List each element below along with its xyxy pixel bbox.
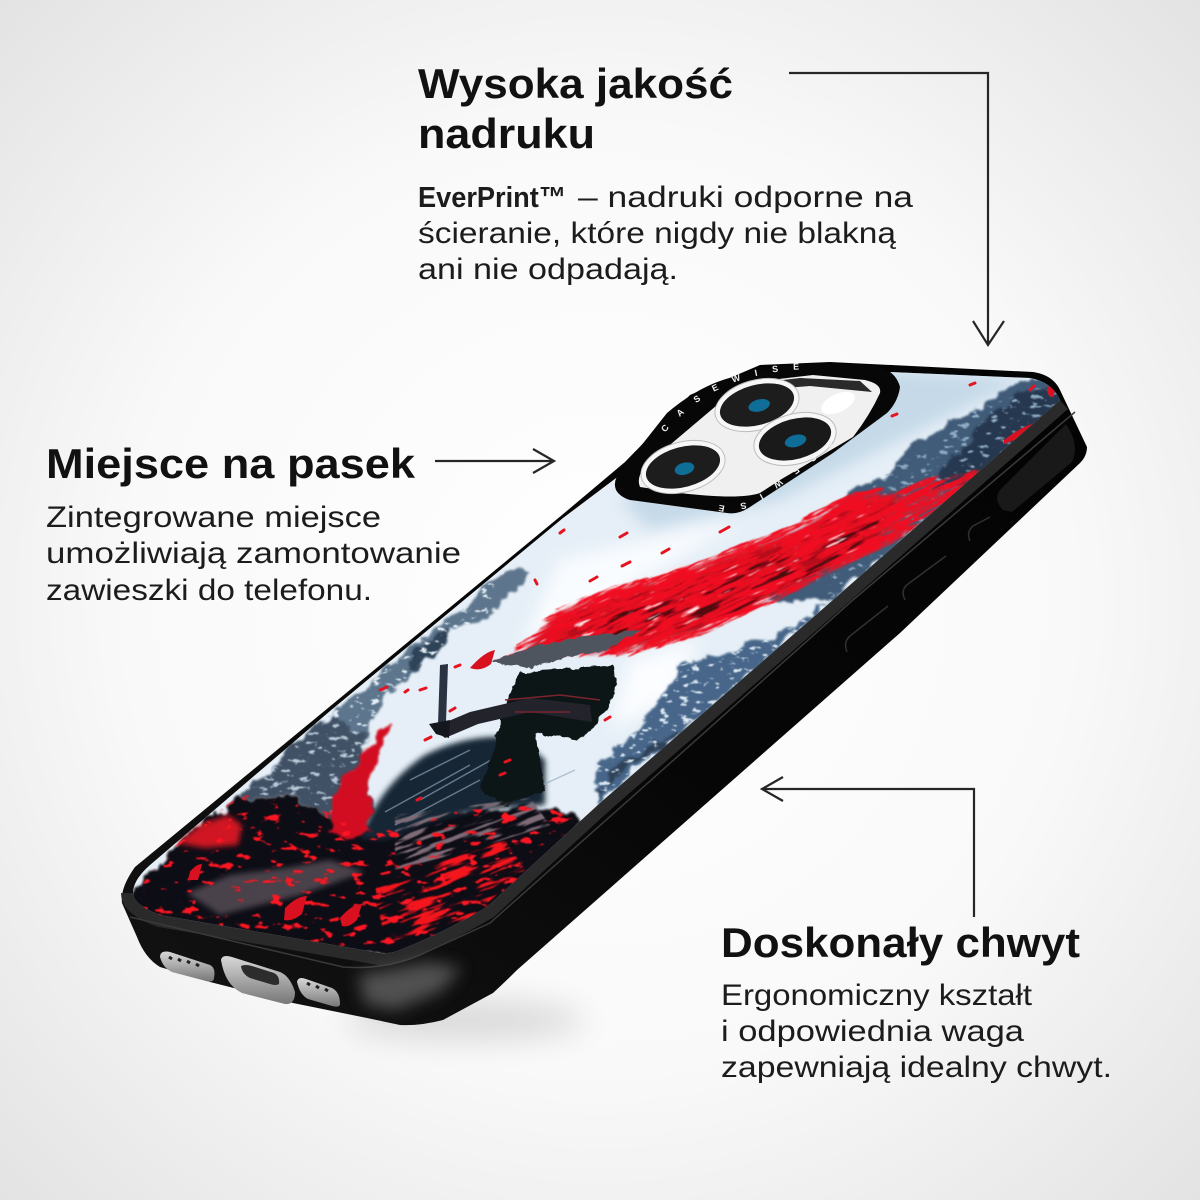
right speaker: [297, 978, 340, 1007]
figure armour details: [505, 695, 600, 712]
art dark cloud upper right: [770, 375, 1070, 600]
art warrior figure: [429, 630, 640, 805]
text: grip description: i odpowiednia waga: [721, 1015, 1024, 1048]
art red base: [525, 495, 900, 652]
art red band dark strokes: [592, 520, 880, 637]
action button: [969, 517, 990, 541]
glossy corner highlight: [358, 962, 462, 1010]
text: print quality description: EverPrint™: [418, 182, 566, 214]
figure arm: [432, 698, 592, 738]
heading: strap slot: Miejsce na pasek: [46, 440, 416, 487]
flash highlight: [818, 387, 858, 419]
art lower-left darkness: [125, 795, 585, 960]
brand text lower: CASEWISE: [718, 442, 832, 512]
callout: print quality: [418, 60, 913, 286]
callout: strap slot: [46, 440, 461, 607]
case rim line: [130, 412, 1075, 968]
mauve streaks: [394, 798, 550, 870]
art red brush band: [496, 468, 981, 660]
figure sword blade: [438, 664, 448, 724]
arrow: strap slot to case: [435, 449, 554, 473]
heading: grip: Doskonały chwyt: [721, 919, 1080, 966]
case rim band: [133, 400, 1060, 953]
art red splashes lower: [141, 722, 574, 948]
art cloak: [360, 737, 575, 840]
arrow: print quality to case: [789, 73, 1004, 345]
lens top: [709, 370, 805, 440]
grey rocks: [187, 860, 365, 915]
art lower blue-grey zone: [240, 713, 372, 835]
usb-c port: [221, 956, 295, 1004]
heading: print quality: [418, 60, 733, 157]
text: strap slot description: Zintegrowane miejsce: [46, 501, 381, 534]
red blob left: [177, 815, 242, 848]
bottom ports: [160, 952, 340, 1007]
camera ring: [615, 363, 900, 513]
camera opening: [639, 375, 880, 496]
printed artwork: [133, 372, 1060, 954]
red accents: [188, 864, 362, 926]
strap slot: [997, 424, 1075, 512]
callout: grip: [721, 919, 1112, 1084]
brand text upper: CASEWISE: [662, 363, 799, 432]
text: grip description: [721, 979, 1112, 1084]
phone case: [121, 362, 1087, 1026]
text: grip description: zapewniają idealny chwyt.: [721, 1051, 1112, 1084]
camera top shadow: [735, 378, 872, 392]
phone shadow: [345, 1000, 585, 1040]
splash upper: [330, 722, 388, 835]
text: print quality description: ścieranie, które nigdy nie blakną: [418, 217, 896, 250]
art cloud lower right: [595, 600, 833, 803]
heading: print quality: nadruku: [418, 110, 595, 157]
heading: print quality: Wysoka jakość: [418, 60, 733, 107]
side buttons: [846, 517, 990, 652]
case body: [122, 362, 1087, 1025]
camera module: [614, 363, 900, 514]
figure body: [480, 665, 615, 805]
figure sword guard: [429, 720, 450, 738]
red streaks lower right: [374, 840, 526, 945]
left speaker: [160, 952, 214, 982]
text: strap slot description: umożliwiają zamontowanie: [46, 537, 461, 570]
arrow: grip to case: [762, 777, 974, 917]
volume button lower: [846, 606, 888, 652]
lens left: [635, 432, 731, 502]
lens right: [748, 404, 842, 474]
figure hat: [490, 630, 640, 668]
red specks: [141, 794, 574, 948]
art sky: [120, 360, 1080, 980]
text: strap slot description: zawieszki do telefonu.: [46, 574, 372, 607]
volume button upper: [903, 556, 946, 600]
art red band light strokes: [538, 505, 884, 648]
text: strap slot description: [46, 501, 461, 607]
art cloud left: [329, 566, 530, 742]
art flying red speckles: [380, 383, 1034, 800]
text: print quality description: – nadruki odporne na: [578, 181, 913, 214]
text: print quality description: ani nie odpadają.: [418, 253, 678, 286]
text: print quality description: [418, 181, 913, 286]
text: grip description: Ergonomiczny kształt: [721, 979, 1033, 1012]
